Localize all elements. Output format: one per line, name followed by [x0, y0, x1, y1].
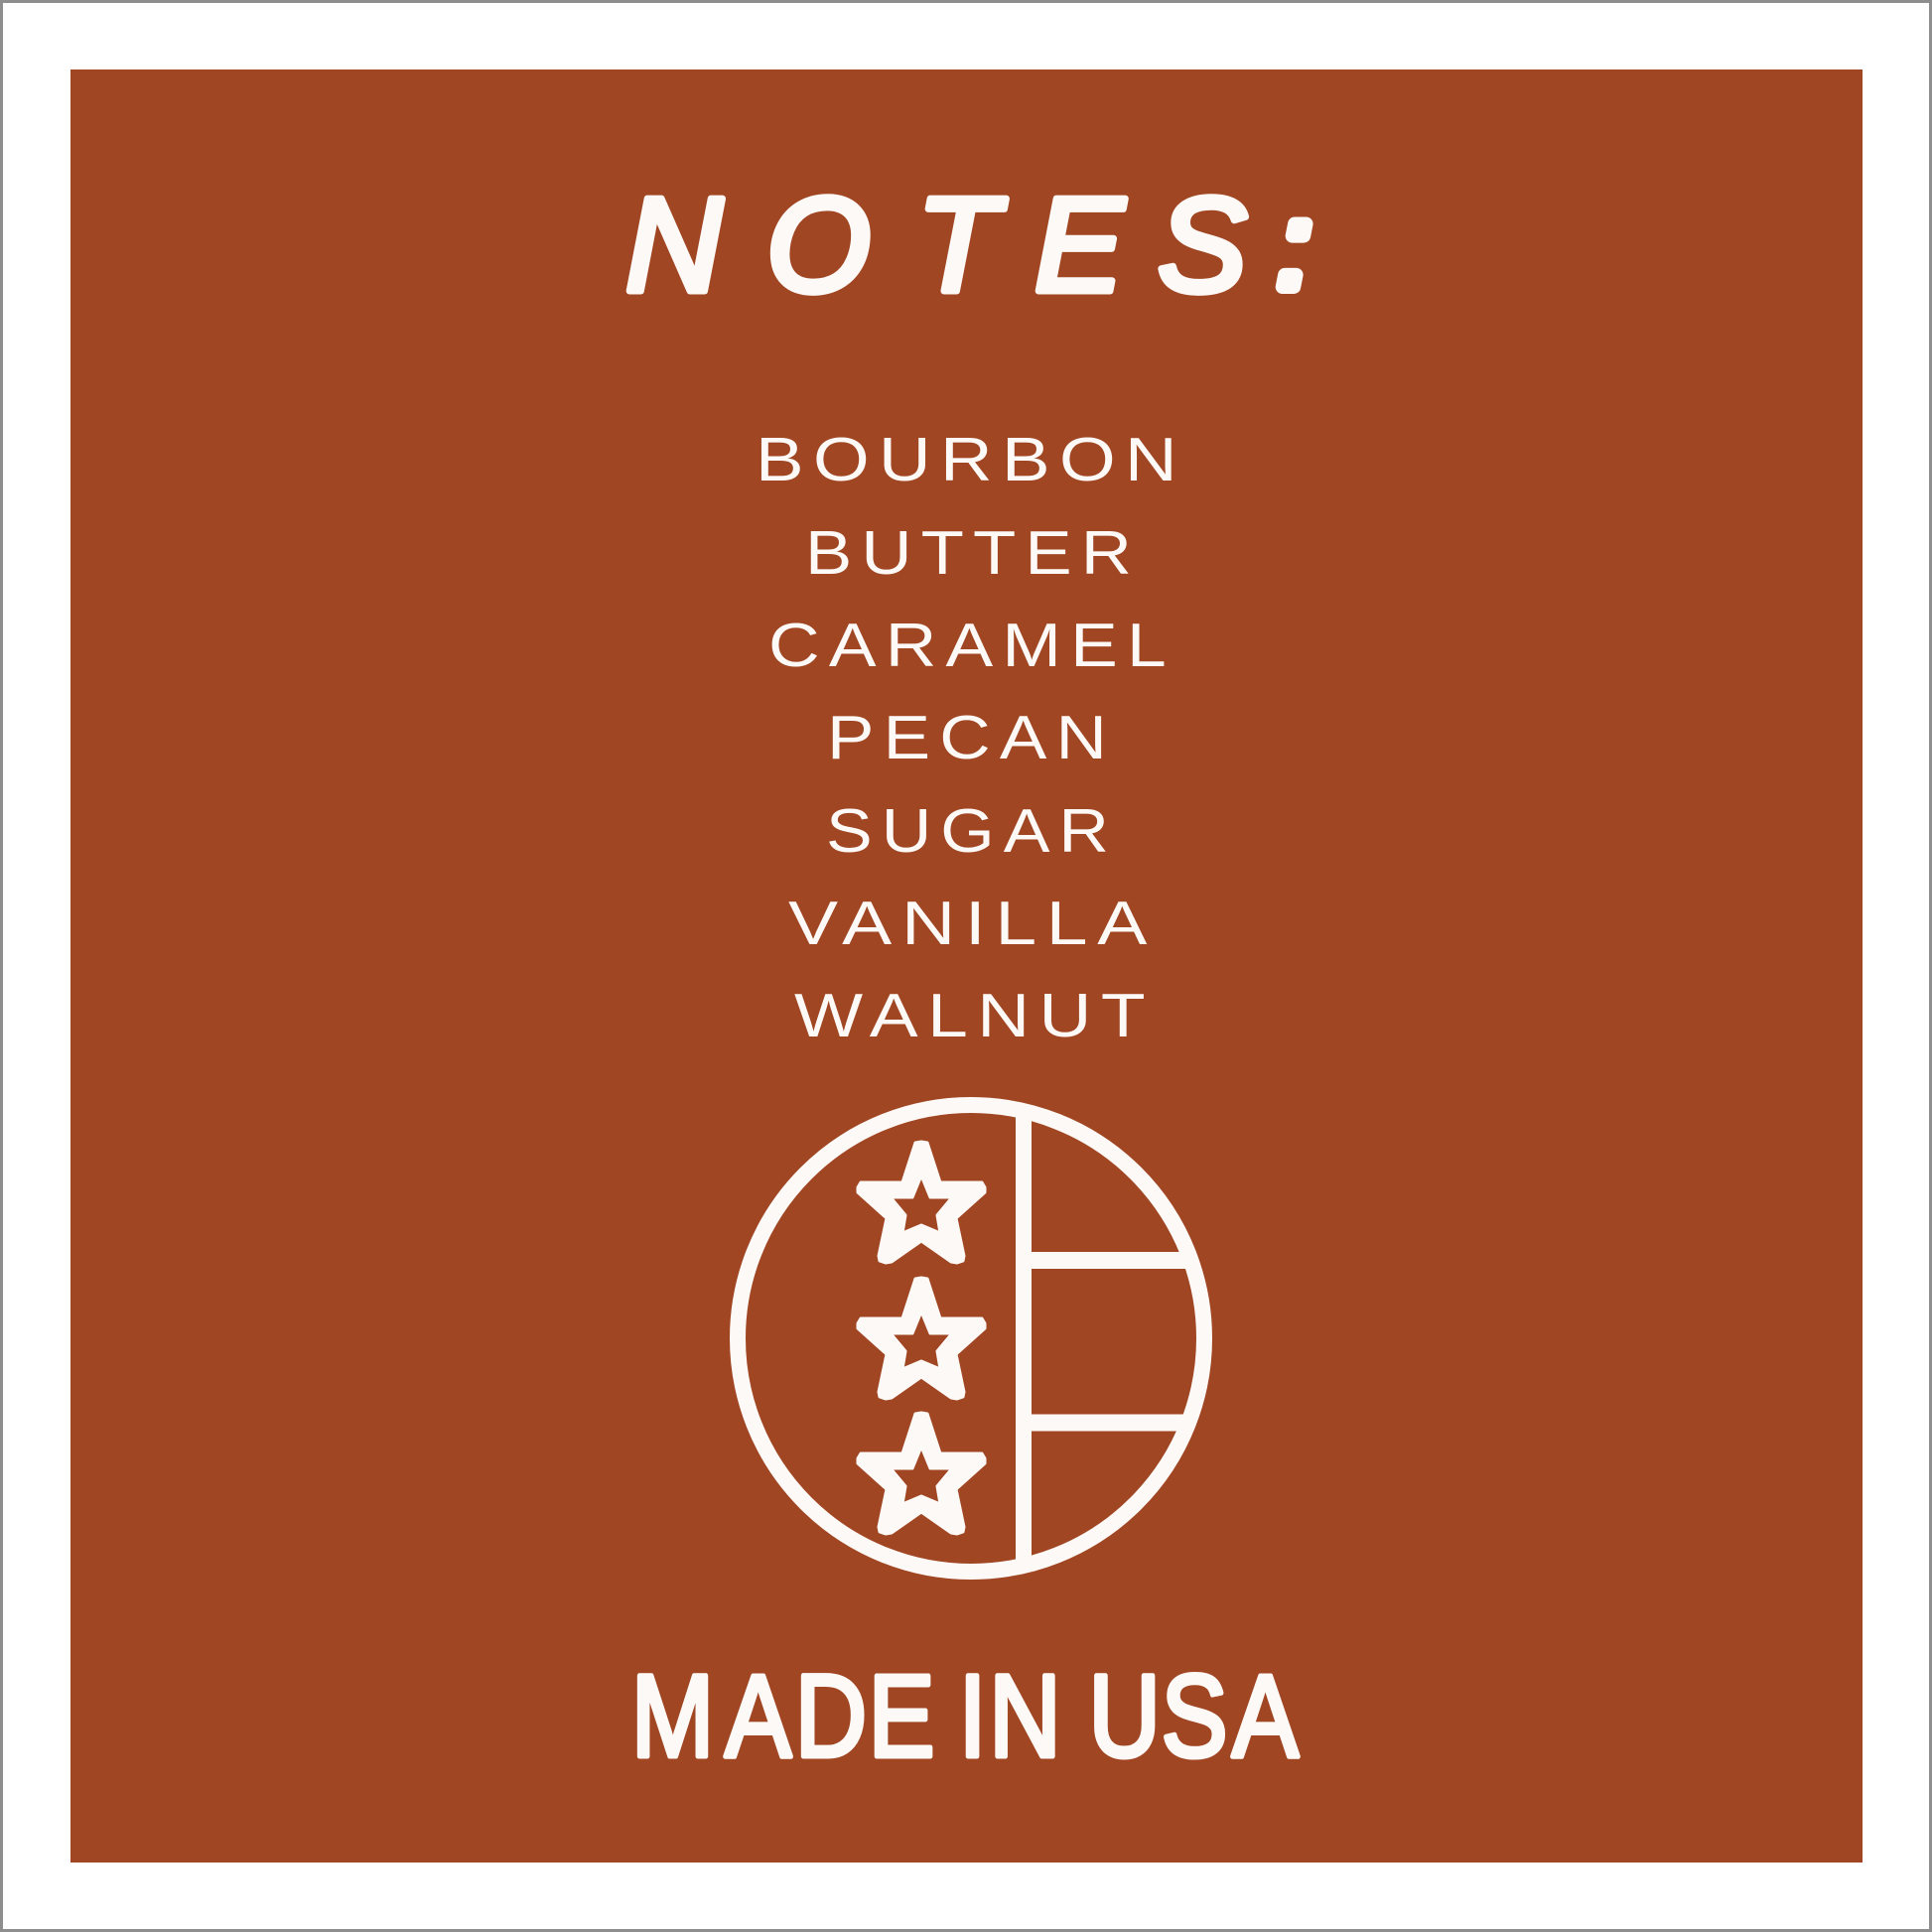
list: flavor notes: [756, 426, 1186, 1050]
note: walnut: WALNUT: [794, 982, 1155, 1050]
icon: star middle: [858, 1278, 985, 1399]
icon: usa flag globe: [738, 1105, 1204, 1572]
title: notes: NOTES: [625, 170, 1247, 320]
note: vanilla: VANILLA: [788, 890, 1157, 958]
icon: star bottom: [858, 1413, 985, 1534]
note: caramel: CARAMEL: [768, 612, 1175, 680]
note: butter: BUTTER: [805, 519, 1141, 588]
title: notes: :: [1278, 180, 1311, 313]
label: made in usa: MADE IN USA: [631, 1651, 1299, 1782]
note: sugar: SUGAR: [826, 797, 1118, 866]
note: bourbon: BOURBON: [756, 426, 1186, 494]
note: pecan: PECAN: [827, 704, 1116, 772]
icon: star top: [858, 1142, 985, 1263]
